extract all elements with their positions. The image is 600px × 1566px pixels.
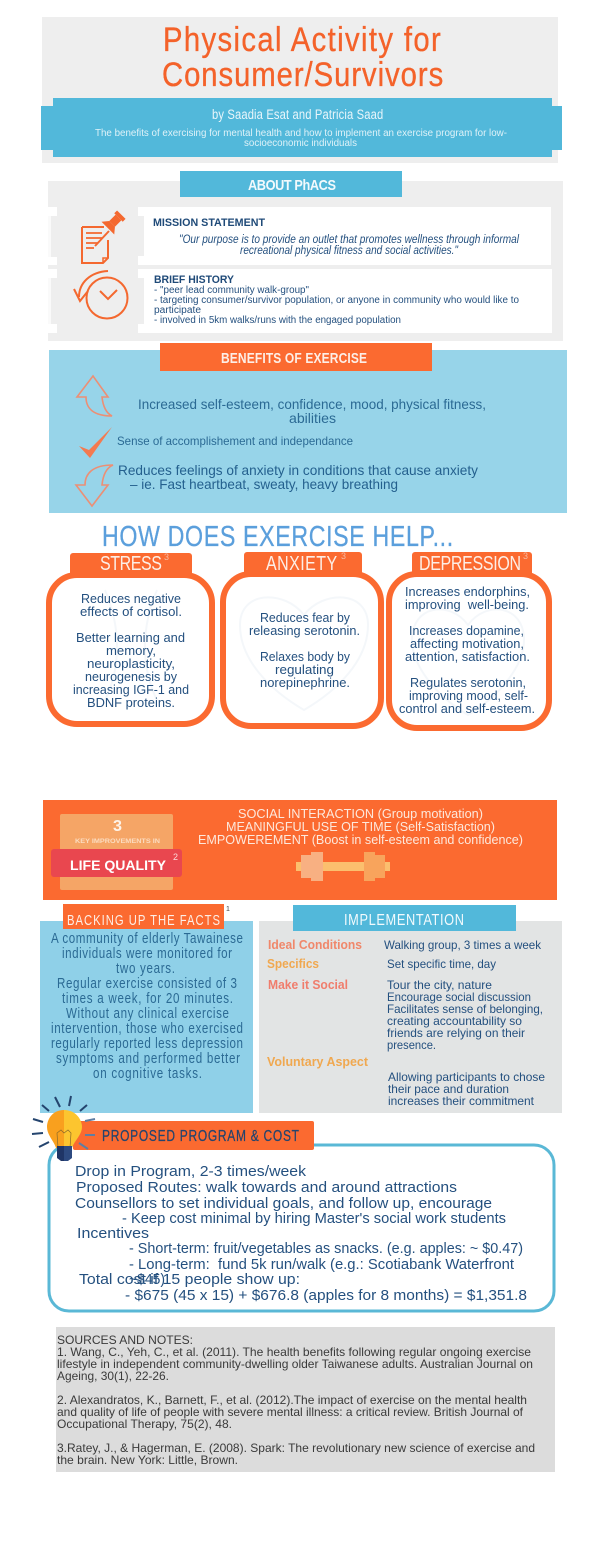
text: study summary	[51, 930, 243, 1081]
labels: implementation categories: Specifics	[267, 957, 319, 971]
title: Consumer/Survivors	[162, 55, 443, 94]
panel: implementation	[259, 905, 562, 1113]
labels: implementation categories: Voluntary Aspect	[267, 1055, 369, 1069]
benefit: self-esteem: Increased self-esteem, confidence, mood, physical fitness,	[138, 396, 486, 412]
panel: benefits of exercise	[49, 343, 567, 513]
text: study summary: symptoms and performed better	[56, 1050, 241, 1066]
heading: benefits of exercise: BENEFITS OF EXERCISE	[221, 350, 367, 366]
text: citations: SOURCES AND NOTES:	[57, 1333, 193, 1347]
badge: 3 key improvements: 2	[173, 852, 178, 862]
brief history box: - targeting consumer/survivor population, or anyone in community who would like to	[154, 295, 519, 306]
banner: authors and summary: The benefits of exercising for mental health and how to implement an exercise program for low-	[95, 128, 507, 139]
text: program details: Proposed Routes: walk towards and around attractions	[76, 1179, 457, 1196]
brief history box	[138, 269, 552, 333]
text: anxiety effects: regulating	[275, 662, 334, 677]
heading: proposed program and cost: PROPOSED PROGRAM & COST	[102, 1126, 299, 1144]
text: depression effects: improving well-being.	[405, 597, 529, 612]
text: implementation details: their pace and duration	[388, 1082, 509, 1096]
text: implementation details: Set specific time, day	[387, 957, 496, 971]
text: implementation details: Walking group, 3 times a week	[384, 938, 542, 952]
text: implementation details: Encourage social discussion	[387, 990, 531, 1004]
text: study summary: individuals were monitored for	[62, 945, 233, 961]
text: anxiety effects: Reduces fear by	[260, 610, 350, 625]
panel: depression	[389, 551, 549, 728]
panel: anxiety: 3	[341, 551, 346, 561]
text: depression effects: affecting motivation,	[410, 636, 524, 651]
text: citations: 2. Alexandratos, K., Barnett, F., et al. (2012).The impact of exercise on the mental health	[57, 1393, 527, 1407]
text: anxiety effects	[249, 610, 360, 690]
text: study summary: on cognitive tasks.	[93, 1065, 202, 1081]
badge: 3 key improvements: KEY IMPROVEMENTS IN	[75, 838, 160, 845]
text: program details: ~$45)	[129, 1272, 165, 1288]
panel: stress: 3	[164, 552, 169, 562]
brief history box: - "peer lead community walk-group"	[154, 285, 309, 296]
text: stress effects	[73, 591, 189, 710]
text: study summary: regularly reported less depression	[51, 1035, 243, 1051]
icon: down arrow	[76, 465, 113, 506]
panel: proposed program and cost	[49, 1121, 554, 1311]
panel: anxiety	[223, 551, 381, 726]
banner: authors and summary: by Saadia Esat and Patricia Saad	[212, 107, 383, 122]
text: study summary: A community of elderly Tawainese	[51, 930, 243, 946]
text: implementation details: Tour the city, nature	[387, 978, 492, 992]
heading: backing up the facts: 1	[226, 906, 230, 913]
text: implementation details: creating accountability so	[387, 1014, 522, 1028]
panel: depression: 3	[523, 551, 528, 561]
text: stress effects: increasing IGF-1 and	[73, 682, 189, 697]
panel: life quality	[43, 800, 557, 900]
text: depression effects	[399, 584, 535, 716]
text: program details: - Long-term: fund 5k run/walk (e.g.: Scotiabank Waterfront	[129, 1257, 514, 1273]
icon: pinned note	[82, 208, 128, 263]
text: program details: Counsellors to set individual goals, and follow up, encourage	[75, 1195, 492, 1212]
labels: implementation categories: Make it Social	[268, 978, 348, 992]
text: stress effects: BDNF proteins.	[87, 695, 175, 710]
panel: stress	[49, 552, 212, 724]
mission statement box: "Our purpose is to provide an outlet that promotes wellness through informal	[179, 234, 519, 246]
heading: proposed program and cost	[73, 1121, 314, 1150]
text: citations	[57, 1333, 535, 1467]
text: citations: Occupational Therapy, 75(2), 48.	[57, 1417, 232, 1431]
text: study summary: two years.	[116, 960, 175, 976]
heading: backing up the facts	[63, 904, 230, 929]
banner: authors and summary: socioeconomic individuals	[244, 138, 357, 149]
text: program details: - Keep cost minimal by hiring Master's social work students	[122, 1211, 506, 1227]
text: depression effects: attention, satisfaction.	[405, 649, 530, 664]
heading: backing up the facts: BACKING UP THE FACTS	[67, 911, 220, 928]
text: key improvements: MEANINGFUL USE OF TIME (Self-Satisfaction)	[226, 819, 495, 834]
title: Physical Activity for	[163, 20, 441, 59]
text: implementation details	[384, 938, 545, 1108]
heading: implementation	[293, 905, 516, 931]
mission statement box	[138, 207, 551, 265]
text: study summary: times a week, for 20 minutes.	[62, 990, 233, 1006]
text: study summary: Without any clinical exercise	[66, 1005, 229, 1021]
text: stress effects: Better learning and	[76, 630, 185, 645]
text: implementation details: Facilitates sense of belonging,	[387, 1002, 543, 1016]
panel: about PhACS	[48, 171, 563, 341]
benefit: accomplishment: Sense of accomplishement and independance	[117, 434, 353, 448]
icon: up arrow	[77, 376, 112, 416]
brief history box: - involved in 5km walks/runs with the engaged population	[154, 315, 401, 326]
benefit: anxiety reduction: Reduces feelings of anxiety in conditions that cause anxiety	[118, 462, 478, 478]
text: implementation details: friends are relying on their	[387, 1026, 525, 1040]
text: stress effects: memory,	[106, 643, 156, 658]
banner: authors and summary	[41, 98, 562, 157]
text: program details: Drop in Program, 2-3 times/week	[75, 1163, 307, 1180]
panel: title header	[41, 17, 562, 163]
benefit: anxiety reduction	[118, 462, 478, 492]
panel: stress: STRESS	[100, 552, 162, 574]
panel: depression: DEPRESSION	[419, 552, 521, 574]
text: citations: 3.Ratey, J., & Hagerman, E. (2008). Spark: The revolutionary new science of exercise and	[57, 1441, 535, 1455]
icon: light bulb	[32, 1096, 95, 1161]
text: depression effects: improving mood, self-	[409, 688, 528, 703]
heading: how does exercise help: HOW DOES EXERCISE HELP...	[102, 519, 453, 553]
text: study summary: intervention, those who exercised	[51, 1020, 243, 1036]
text: stress effects: neurogenesis by	[85, 669, 177, 684]
text: study summary: Regular exercise consisted of 3	[57, 975, 237, 991]
badge: 3 key improvements: 3	[113, 818, 122, 835]
mission statement box: MISSION STATEMENT	[153, 217, 265, 229]
heading: implementation: IMPLEMENTATION	[344, 912, 464, 929]
text: stress effects: effects of cortisol.	[80, 604, 182, 619]
text: depression effects: Increases endorphins,	[405, 584, 530, 599]
labels: implementation categories	[267, 938, 369, 1069]
text: anxiety effects: Relaxes body by	[260, 649, 350, 664]
text: stress effects: neuroplasticity,	[87, 656, 175, 671]
icon: dumbbell	[296, 852, 390, 881]
badge: 3 key improvements	[51, 814, 182, 890]
text: citations: lifestyle in independent community-dwelling older Taiwanese adults. Australian Journal on	[57, 1357, 533, 1371]
text: citations: Ageing, 30(1), 22-26.	[57, 1369, 169, 1383]
panel: backing up the facts	[40, 904, 253, 1113]
text: citations: the brain. New York: Little, Brown.	[57, 1453, 238, 1467]
text: citations: 1. Wang, C., Yeh, C., et al. (2011). The health benefits following regular ongoing exercise	[57, 1345, 531, 1359]
text: implementation details: Allowing participants to chose	[388, 1070, 545, 1084]
brief history box: participate	[154, 305, 201, 316]
benefit: anxiety reduction: – ie. Fast heartbeat, sweaty, heavy breathing	[130, 476, 398, 492]
heading: about PhACS: ABOUT PhACS	[248, 176, 336, 193]
text: key improvements: EMPOWEREMENT (Boost in self-esteem and confidence)	[198, 832, 523, 847]
text: program details: Incentives	[77, 1225, 149, 1242]
icon: clock with return arrow	[74, 271, 128, 318]
text: implementation details: increases their commitment	[388, 1094, 535, 1108]
mission statement box: recreational physical fitness and social activities."	[240, 245, 459, 257]
brief history box: BRIEF HISTORY	[154, 274, 235, 286]
heading: about PhACS	[180, 171, 402, 197]
text: program details: - Short-term: fruit/vegetables as snacks. (e.g. apples: ~ $0.47)	[129, 1241, 523, 1257]
heading: benefits of exercise	[160, 343, 432, 371]
text: program details: - $675 (45 x 15) + $676.8 (apples for 8 months) = $1,351.8	[125, 1287, 527, 1304]
text: stress effects: Reduces negative	[81, 591, 181, 606]
text: depression effects: control and self-esteem.	[399, 701, 535, 716]
text: depression effects: Regulates serotonin,	[410, 675, 526, 690]
text: key improvements: SOCIAL INTERACTION (Group motivation)	[238, 806, 483, 821]
text: anxiety effects: norepinephrine.	[260, 675, 350, 690]
panel: sources and notes	[56, 1327, 555, 1472]
panel: anxiety: ANXIETY	[266, 552, 337, 574]
text: depression effects: Increases dopamine,	[409, 623, 524, 638]
text: citations: and quality of life of people with severe mental illness: a critical review. British Journal of	[57, 1405, 524, 1419]
benefit: self-esteem: abilities	[289, 410, 336, 426]
text: program details: Total cost if 15 people show up:	[79, 1271, 300, 1288]
labels: implementation categories: Ideal Conditions	[268, 938, 362, 952]
text: anxiety effects: releasing serotonin.	[249, 623, 360, 638]
badge: 3 key improvements: LIFE QUALITY	[70, 857, 167, 873]
text: implementation details: presence.	[387, 1038, 436, 1052]
text: program details	[75, 1163, 527, 1304]
benefit: self-esteem	[138, 396, 486, 426]
title	[162, 20, 443, 94]
text: key improvements	[198, 806, 523, 847]
icon: check mark	[79, 427, 112, 458]
